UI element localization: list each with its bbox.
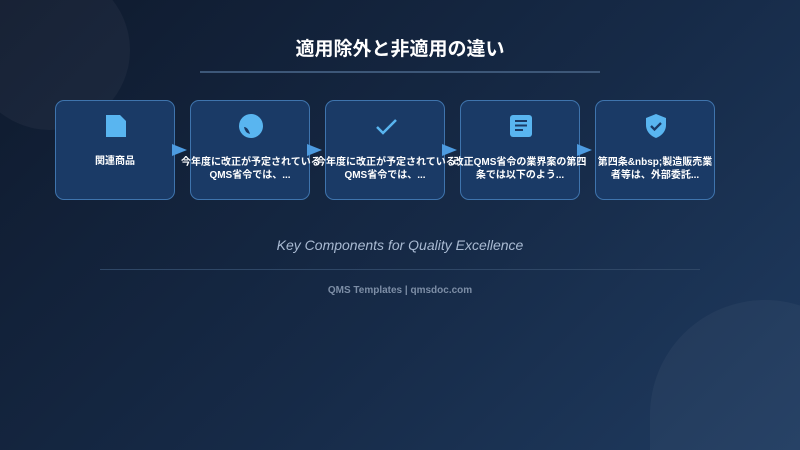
text 4: [454, 156, 586, 181]
icon: file: [106, 115, 126, 137]
text 5: 者等は、外部委託...: [611, 170, 699, 181]
title: 適用除外と非適用の違い: [295, 39, 504, 60]
text 3: 今年度に改正が予定されている: [316, 157, 456, 168]
text 5: 第四条&nbsp;製造販売業: [598, 157, 712, 168]
text 3: [316, 156, 456, 181]
text 2: 今年度に改正が予定されている: [181, 157, 321, 168]
card 3: [325, 100, 445, 200]
footer: QMS Templates | qmsdoc.com: [328, 285, 472, 296]
text 1: 関連商品: [95, 156, 135, 167]
text 4: 条では以下のよう...: [476, 170, 564, 181]
card 5: [595, 100, 715, 200]
text 2: [181, 156, 321, 181]
text 2: QMS省令では、...: [209, 170, 291, 181]
arrow 3: [442, 144, 457, 156]
text 3: QMS省令では、...: [344, 170, 426, 181]
text 5: [598, 156, 712, 181]
icon: shield: [646, 114, 666, 138]
arrow 1: [172, 144, 187, 156]
card 2: [190, 100, 310, 200]
icon: check: [376, 119, 397, 135]
arrow 2: [307, 144, 322, 156]
subtitle: Key Components for Quality Excellence: [277, 237, 523, 253]
icon: circle: [239, 114, 263, 138]
text 4: 改正QMS省令の業界案の第四: [454, 157, 586, 168]
card 4: [460, 100, 580, 200]
icon: document: [510, 115, 532, 137]
card 1: [55, 100, 175, 200]
arrow 4: [577, 144, 592, 156]
